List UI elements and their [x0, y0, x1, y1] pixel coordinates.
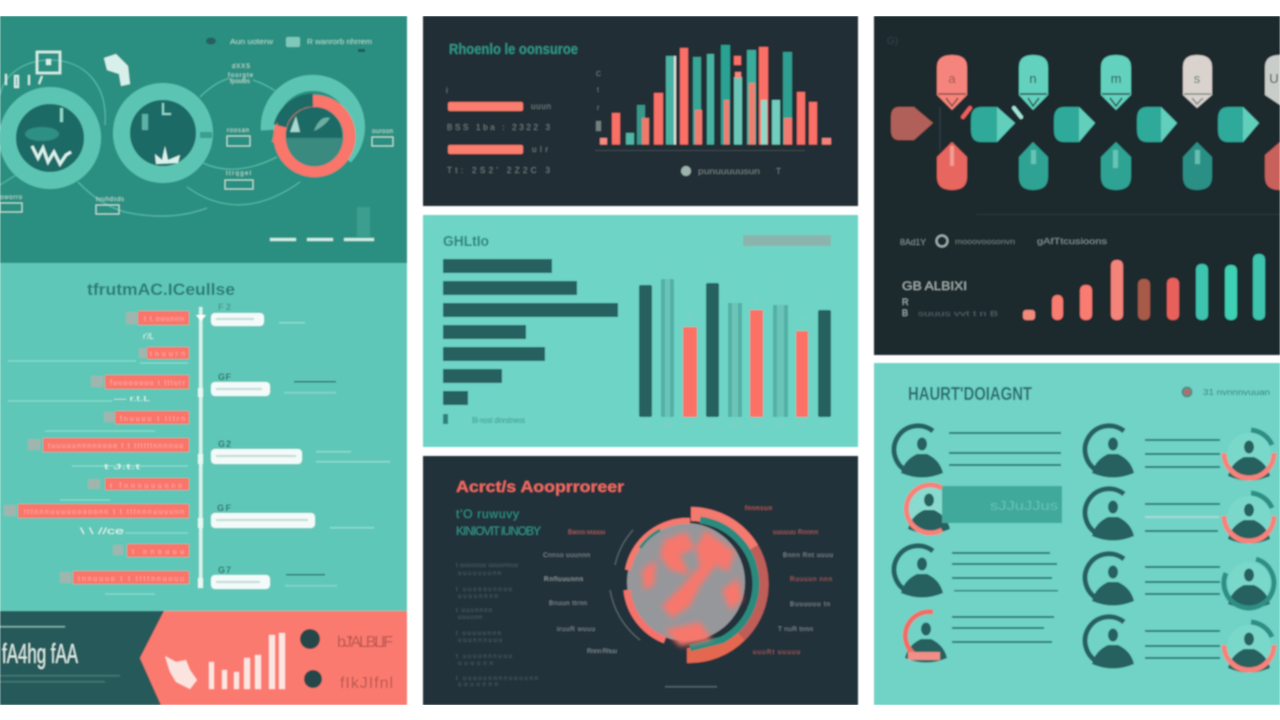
progress captions: ulr — [532, 145, 548, 154]
left bullet text: t uuunnnn — [456, 608, 492, 614]
right callouts: fnnnsun — [745, 505, 772, 512]
pale divider lines and notes: \ \ //ce — [80, 526, 124, 536]
coral bar captions: fnuuuu t tttrn — [120, 416, 185, 423]
progress captions: Tt: 2S2' 2Z2C 3 — [447, 166, 551, 175]
connector curves — [0, 60, 300, 216]
axis ticks: C — [596, 71, 601, 78]
right callouts: Bnnn Rnt uuuu — [783, 552, 833, 559]
legend: 31 nvnnnvuuan — [1203, 388, 1270, 397]
data labels: ttrqgel — [226, 171, 251, 177]
left bullet text: t uuuuunnnnuuuunn — [456, 676, 538, 682]
panel: histogram — [423, 16, 858, 206]
left callouts: iruuR wuuu — [557, 626, 595, 633]
legend — [1182, 386, 1270, 398]
value ticks: t — [755, 296, 758, 305]
axis ticks: r — [597, 105, 600, 112]
coral bar captions: t fnnnuuunnn — [110, 483, 182, 490]
coral bar captions: tttnnnuuuuuoooonn t t tttnnnuuuunn — [24, 509, 184, 516]
left bullet text: t uuuouuu uuuunnuu — [456, 563, 518, 569]
left callouts — [543, 529, 617, 655]
data labels: foorgte — [228, 73, 254, 79]
left bullet text: t uuuuunnn — [456, 631, 501, 637]
pill year labels: GF — [217, 503, 232, 513]
panel: rings overview — [0, 16, 407, 263]
bottom row pills — [937, 142, 1280, 190]
progress captions: BSS 1ba : 2322 3 — [447, 123, 551, 132]
pill year labels — [217, 302, 232, 575]
data labels: dXXS — [232, 64, 250, 70]
axis labels: UF — [708, 423, 716, 429]
heading: GHLtIo — [443, 233, 489, 250]
heading: Rhoenlo le oonsuroe — [449, 41, 578, 58]
coral labels: fIkJIfnl — [340, 675, 393, 692]
coral arrow block — [140, 611, 407, 705]
dark section scribble: fA4hg fAA — [2, 638, 78, 669]
white bar chart — [209, 633, 285, 689]
stat text: GB ALBIXI — [902, 279, 967, 293]
icon: dark badge one — [300, 629, 320, 649]
coral bar captions: fuuooouuu t ttturr — [110, 380, 186, 387]
panel: radial breakdown — [423, 456, 858, 705]
stat text: R — [902, 297, 909, 307]
icon: dark badge two — [304, 670, 322, 688]
axis labels: W1 — [730, 423, 740, 429]
right callouts: Buuuuuu tn — [790, 601, 830, 608]
left bullet text: uuuuuuunn — [458, 571, 501, 577]
legend — [206, 37, 372, 52]
timeline spine — [196, 307, 206, 588]
value ticks: t — [801, 315, 804, 324]
chart footnote — [665, 686, 717, 688]
chart legend: T — [776, 167, 781, 176]
bottom row marks — [950, 146, 1200, 168]
left bullet text: uuuunn — [458, 661, 493, 667]
data labels: ouroon — [372, 129, 393, 135]
coral bar captions: tuuuuunnnnoooo t t ttttttnnnnuu — [48, 443, 183, 450]
left callouts: Rnnn Rhuu — [587, 648, 617, 655]
stat text: B — [902, 308, 908, 318]
pill year labels: G7 — [218, 565, 231, 575]
coral bar tags — [4, 312, 146, 583]
coral bar captions — [24, 316, 186, 583]
data labels: roosan — [227, 128, 249, 134]
histogram bars — [600, 45, 831, 144]
ring chart three — [269, 83, 357, 171]
value ticks: I — [666, 261, 668, 270]
coral labels: bJ'ALBLIF — [337, 634, 393, 651]
heading: Acrct/s Aooprroreer — [456, 479, 624, 496]
left bullet text: uuuunnn — [458, 682, 498, 688]
progress captions: i — [446, 86, 448, 95]
left bullet text: t uuuoounnuu — [456, 587, 512, 593]
legend row: mooovoosonvn — [955, 239, 1015, 246]
pill year labels: F2 — [218, 302, 231, 312]
coral labels — [337, 634, 393, 692]
stat text — [902, 279, 999, 318]
arrow facets — [997, 107, 1259, 142]
middle row arrows — [891, 107, 1259, 142]
pale divider lines and notes: — r.t.L — [114, 396, 150, 403]
subheading — [456, 507, 541, 538]
left callouts: Cnnso uuunnn — [543, 552, 590, 559]
legend row: 8Ad1Y — [900, 238, 927, 247]
pale divider lines and notes: r'/L — [143, 332, 154, 341]
top row pills — [937, 55, 1280, 110]
top row markers: U — [1269, 71, 1279, 86]
pill year labels: G2 — [218, 439, 231, 449]
map blotches — [642, 530, 742, 646]
value ticks: t — [689, 311, 692, 320]
panel: process flow — [874, 16, 1280, 355]
axis labels — [643, 423, 828, 429]
axis labels: U7 — [686, 423, 694, 429]
left text lines — [949, 432, 1061, 643]
value ticks: I — [734, 283, 736, 292]
left bullet text: uuuunnnn — [458, 594, 498, 600]
panel: diverging timeline — [0, 263, 407, 611]
right callouts — [745, 505, 833, 656]
axis ticks — [595, 71, 805, 151]
axis labels: W1 — [664, 423, 673, 429]
stat text: suuus vvt t n B — [918, 311, 999, 318]
dark section scribble — [0, 626, 120, 682]
left bullet text: uuuunn — [458, 615, 482, 621]
horizontal bars — [443, 259, 618, 405]
left bullet text: uuunnnuuu — [458, 638, 502, 644]
panel: bar comparison — [423, 215, 858, 447]
pie chart — [627, 507, 769, 663]
axis labels: 11 — [643, 423, 650, 429]
legend row: gAfTtcusioons — [1037, 237, 1107, 246]
legend: Aun uoterw — [230, 39, 274, 46]
coral bar captions: tnuurn — [150, 351, 185, 358]
ring chart two — [122, 92, 212, 174]
right text lines — [1145, 439, 1220, 659]
ring chart one — [8, 96, 92, 180]
section divider — [976, 214, 1280, 215]
right callouts: Ruuuun nnn — [790, 576, 832, 583]
pale divider lines and notes: t J.t.t — [104, 464, 140, 471]
pill year labels: GF — [218, 372, 232, 382]
highlighted row text: sJJuJJus — [990, 498, 1059, 513]
value ticks: I — [779, 283, 781, 292]
progress captions: uuun — [531, 102, 551, 111]
data labels — [0, 64, 393, 214]
pale divider lines and notes — [8, 332, 188, 594]
top row markers: a — [948, 71, 956, 86]
value ticks: I — [711, 267, 713, 276]
left callouts: Bnuun ttrnn — [549, 600, 587, 607]
thin arcs — [610, 530, 640, 640]
vertical bars — [639, 279, 831, 417]
rounded bar chart — [1023, 254, 1265, 320]
value ticks: I — [823, 291, 825, 300]
side notes — [279, 322, 390, 586]
legend: R wanrorb nhrrem — [307, 39, 372, 46]
top row markers — [948, 71, 1279, 86]
axis labels: U7 — [752, 423, 760, 429]
bar legend: Bl-nost dinrstneos — [472, 416, 525, 425]
icon: leaf blob — [104, 54, 130, 86]
axis labels: U7 — [798, 423, 806, 429]
coral progress bars — [448, 102, 523, 154]
data labels: oworro — [0, 195, 23, 201]
left avatars — [894, 426, 950, 662]
top row markers: s — [1194, 71, 1201, 86]
coral bars — [18, 311, 189, 584]
data labels: fpoulbs — [230, 79, 250, 85]
pill contents — [216, 318, 308, 583]
subheading: t'O ruwuvy — [456, 507, 519, 521]
icon: square badge — [6, 52, 60, 87]
value ticks: I — [645, 270, 647, 279]
right callouts: uuuRt uuuuu — [753, 649, 800, 656]
icon: white splash — [165, 656, 197, 689]
chart legend: punuuuuusun — [698, 167, 760, 176]
panel: bottom strip — [0, 611, 407, 705]
bar legend — [443, 414, 525, 425]
heading: tfrutmAC.ICeullse — [87, 280, 235, 299]
grey tag — [743, 235, 831, 246]
data labels: tvuhdsds — [96, 197, 124, 203]
axis labels: TF — [820, 423, 828, 429]
white pills — [211, 313, 315, 589]
heading: HAURT'DOIAGNT — [908, 384, 1032, 404]
right callouts: T nuR tnnn — [778, 626, 813, 633]
subheading: KINIOVIT iUNOBY — [456, 524, 541, 538]
panel: people list — [874, 363, 1280, 705]
middle avatars — [1085, 426, 1134, 668]
coral bar captions: t t.oounnn — [144, 316, 184, 323]
highlighted row block — [942, 486, 1062, 523]
chart legend — [681, 166, 781, 176]
left callouts: Baoss wuuuu — [568, 529, 605, 536]
left bullet text — [456, 563, 538, 688]
corner glyph: G) — [887, 36, 898, 47]
top row markers: n — [1029, 71, 1037, 86]
axis ticks: t — [597, 87, 599, 94]
legend row — [900, 236, 1107, 247]
left bullet text: t uuuunnnuuu — [456, 654, 512, 660]
progress captions — [446, 86, 551, 175]
coral bar captions: t nnouuu — [132, 549, 184, 556]
mini bar chart — [270, 207, 374, 241]
axis labels: UF — [776, 423, 784, 429]
flow dashes — [940, 108, 1021, 150]
coral bar captions: tnnuuuo t t ttttnnuuuu — [78, 576, 184, 583]
value ticks — [645, 261, 825, 324]
top row markers: m — [1111, 71, 1121, 86]
right avatars — [1224, 430, 1274, 672]
right callouts: uuuuuu Rnnnn — [773, 529, 818, 536]
left callouts: Rnfluuunnn — [544, 576, 583, 583]
top row notches — [938, 94, 1211, 106]
